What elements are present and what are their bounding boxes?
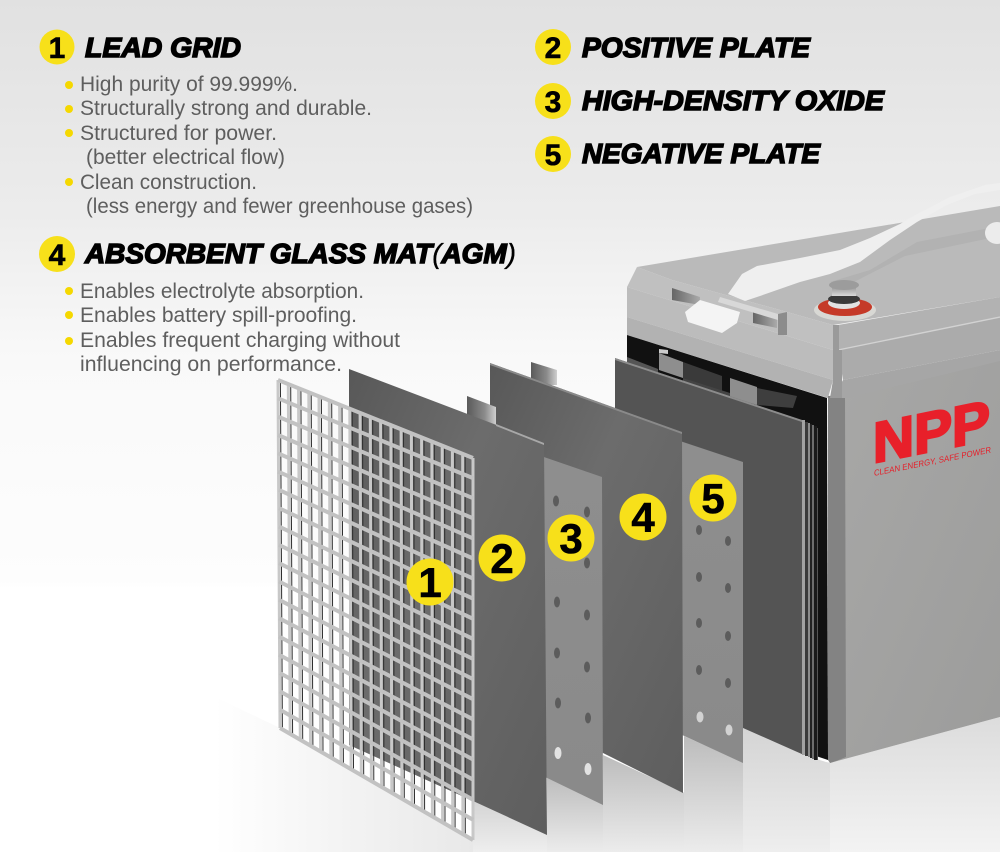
battery corner pillar <box>828 395 846 763</box>
lead grid text: Structurally strong and durable. <box>80 97 372 120</box>
lead grid bullets <box>65 81 73 186</box>
battery interior <box>627 335 828 760</box>
NPP logo: CLEAN ENERGY, SAFE POWER <box>874 445 991 478</box>
strap <box>728 183 1000 301</box>
section: negative plate: 5 <box>545 139 561 172</box>
plate 4 absorbent mat <box>490 362 683 793</box>
strap shadow on lid <box>830 226 1000 284</box>
lead grid text: High purity of 99.999%. <box>80 73 298 96</box>
lid corner <box>830 325 842 398</box>
plate 2 tab <box>467 396 496 425</box>
plate 3 glass mat <box>541 456 603 805</box>
section: high-density oxide: HIGH-DENSITY OXIDE <box>582 85 885 116</box>
marker 2 on positive plate <box>478 534 526 582</box>
clip <box>685 300 740 333</box>
interior tabs <box>627 349 797 408</box>
grid horizontal bars <box>278 380 473 840</box>
lead grid text: (better electrical flow) <box>86 146 285 169</box>
lid highlight line <box>838 317 1000 350</box>
marker 4 on absorbent mat: 4 <box>631 494 655 541</box>
lead grid text: (less energy and fewer greenhouse gases) <box>86 195 473 218</box>
negative plate stack <box>615 358 818 760</box>
badge 4 <box>39 236 75 272</box>
plate 5 glass mat <box>680 441 743 763</box>
lead grid text: Structured for power. <box>80 122 277 145</box>
section: lead grid <box>40 30 473 218</box>
battery lid top surface <box>637 206 1000 325</box>
slots <box>672 288 787 335</box>
marker 3 on glass mat: 3 <box>559 515 583 562</box>
heading absorbent glass mat: ABSORBENT GLASS MAT(AGM) <box>84 238 516 269</box>
agm text: Enables electrolyte absorption. <box>80 280 364 303</box>
section: high-density oxide: 3 <box>545 86 561 119</box>
lid right bevel <box>838 297 1000 350</box>
section: positive plate: 2 <box>545 32 561 65</box>
plate 4 tab <box>531 362 557 385</box>
handle end <box>985 222 1000 244</box>
marker 1 on grid: 1 <box>418 559 442 606</box>
heading lead grid: LEAD GRID <box>85 32 241 63</box>
marker 5 on mat <box>690 474 736 522</box>
section: absorbent glass mat <box>39 236 516 376</box>
section: positive plate: POSITIVE PLATE <box>582 32 811 63</box>
battery <box>627 183 1000 763</box>
marker 1 on grid <box>406 558 454 606</box>
floor shadow under grid <box>215 697 477 852</box>
agm text: influencing on performance. <box>80 353 342 376</box>
lead grid text: Clean construction. <box>80 171 257 194</box>
section: negative plate: NEGATIVE PLATE <box>582 138 821 169</box>
marker 3 on glass mat <box>548 514 594 562</box>
agm text: Enables frequent charging without <box>80 329 400 352</box>
grid shadow lines <box>280 380 465 834</box>
agm text: Enables battery spill-proofing. <box>80 304 357 327</box>
marker 5 on mat: 5 <box>701 475 725 522</box>
agm text <box>80 280 400 376</box>
marker 2 on positive plate: 2 <box>490 535 514 582</box>
lid left band <box>627 287 833 380</box>
marker 4 on absorbent mat <box>620 494 666 541</box>
lid lower band left <box>627 317 833 398</box>
grid vertical bars <box>278 380 473 840</box>
lead grid text <box>80 73 473 218</box>
badge 1 <box>40 30 74 65</box>
plate 2 positive plate <box>349 369 547 835</box>
badge 4: 4 <box>49 239 66 272</box>
lid right band <box>838 317 1000 380</box>
floor reflections of plates <box>473 717 1000 852</box>
agm bullets <box>65 287 73 345</box>
lid lower band right <box>833 350 1000 398</box>
plate 1 lead grid <box>278 380 473 840</box>
lid upper left bevel <box>627 267 833 350</box>
badge 1: 1 <box>49 32 65 65</box>
terminal <box>814 280 876 321</box>
battery front right face <box>828 360 1000 763</box>
NPP logo: NPP <box>873 389 990 476</box>
